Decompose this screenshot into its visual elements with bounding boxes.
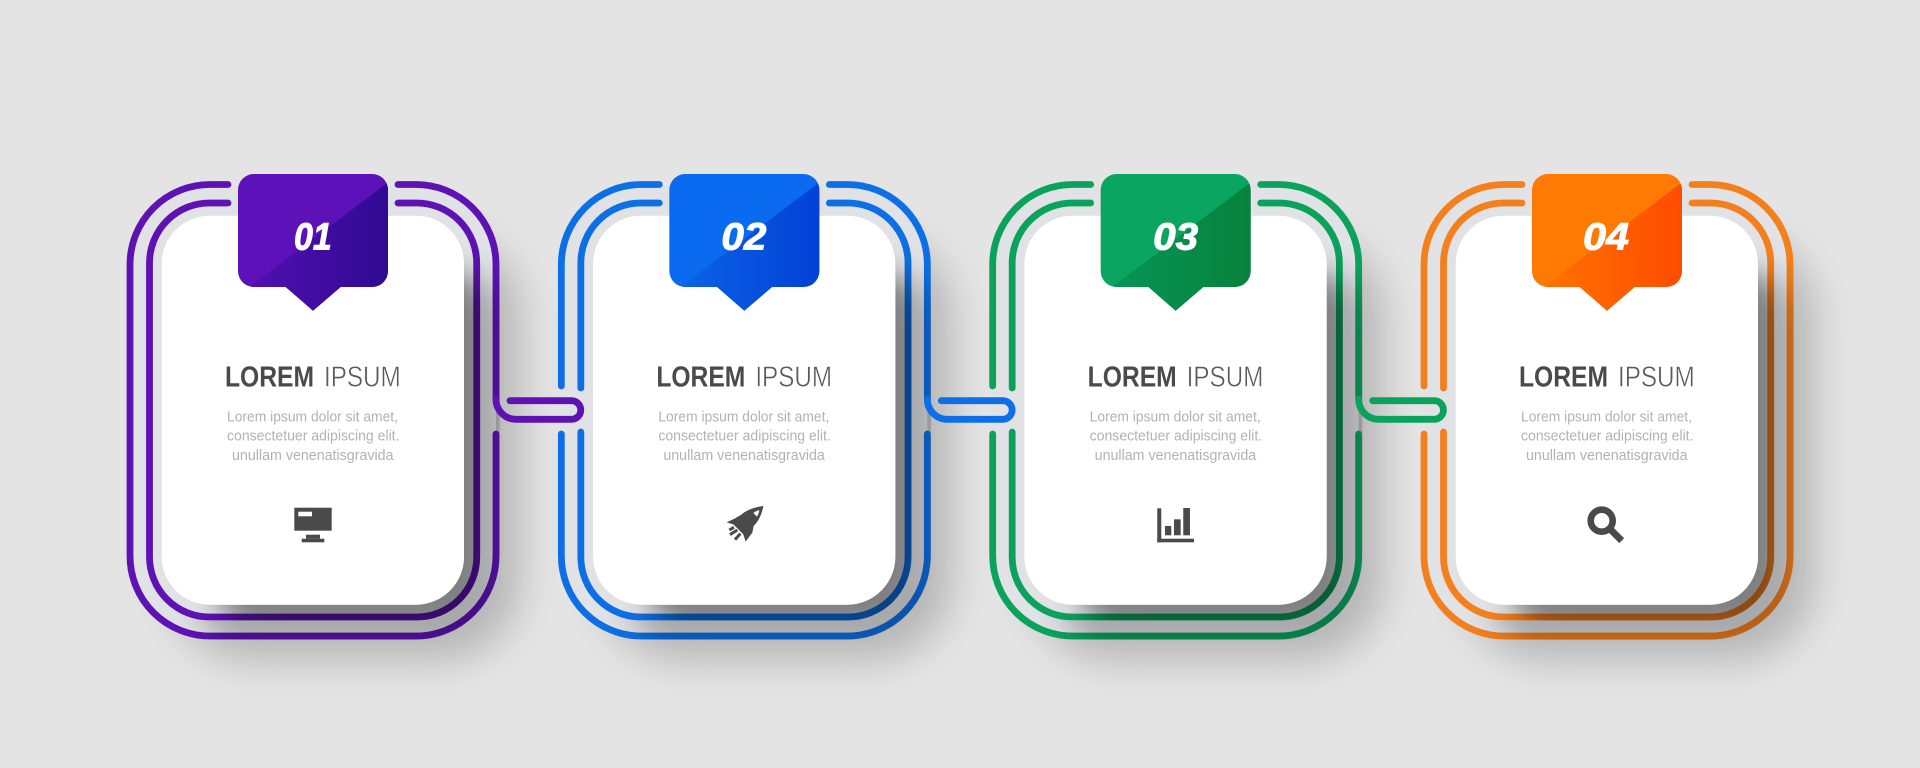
heading 02 <box>656 362 832 394</box>
panel: step 01 <box>130 174 520 660</box>
body text 02: Lorem ipsum dolor sit amet, <box>658 410 829 426</box>
icon: monitor <box>294 508 332 542</box>
body text 01 <box>227 410 400 464</box>
heading 01: LOREM <box>225 362 314 394</box>
badge 03: 03 <box>1153 216 1198 258</box>
heading 04: IPSUM <box>1618 362 1695 394</box>
badge 04 <box>1532 174 1682 311</box>
icon: bar chart <box>1157 508 1194 542</box>
ring lines: purple <box>130 184 496 636</box>
body text 01: unullam venenatisgravida <box>232 448 394 464</box>
body text 04 <box>1521 410 1694 464</box>
badge 02: 02 <box>721 216 766 258</box>
arrow: connector 03 to 04 <box>1359 399 1443 419</box>
heading 02: IPSUM <box>755 362 832 394</box>
heading 01: IPSUM <box>324 362 401 394</box>
heading 02: LOREM <box>656 362 745 394</box>
ring lines: orange <box>1424 184 1790 636</box>
heading 03: IPSUM <box>1187 362 1263 394</box>
panel: step 03 <box>993 174 1383 660</box>
body text 01: Lorem ipsum dolor sit amet, <box>227 410 398 426</box>
body text 03 <box>1090 410 1262 464</box>
icon: rocket <box>727 506 763 542</box>
body text 03: consectetuer adipiscing elit. <box>1090 429 1262 445</box>
body text 04: unullam venenatisgravida <box>1526 448 1688 464</box>
body text 03: Lorem ipsum dolor sit amet, <box>1090 410 1261 426</box>
heading 01 <box>225 362 401 394</box>
heading 04 <box>1519 362 1695 394</box>
arrow: connector 01 to 02 <box>496 399 581 419</box>
heading 03: LOREM <box>1088 362 1177 394</box>
ring lines: green <box>993 184 1359 636</box>
panel: step 02 <box>561 174 951 660</box>
ring lines: blue <box>561 184 927 636</box>
heading 03 <box>1088 362 1263 394</box>
badge 04: 04 <box>1583 216 1629 258</box>
heading 04: LOREM <box>1519 362 1608 394</box>
body text 02: unullam venenatisgravida <box>663 448 826 464</box>
body text 04: consectetuer adipiscing elit. <box>1521 429 1694 445</box>
icon: magnifier <box>1591 510 1622 541</box>
body text 02: consectetuer adipiscing elit. <box>658 429 831 445</box>
body text 02 <box>658 410 831 464</box>
badge 01 <box>238 174 388 311</box>
badge 03 <box>1101 174 1251 311</box>
body text 03: unullam venenatisgravida <box>1095 448 1257 464</box>
body text 01: consectetuer adipiscing elit. <box>227 429 400 445</box>
panel: step 04 <box>1424 174 1814 660</box>
body text 04: Lorem ipsum dolor sit amet, <box>1521 410 1692 426</box>
arrow: connector 02 to 03 <box>927 399 1012 419</box>
badge 01: 01 <box>294 216 332 258</box>
badge 02 <box>669 174 819 311</box>
